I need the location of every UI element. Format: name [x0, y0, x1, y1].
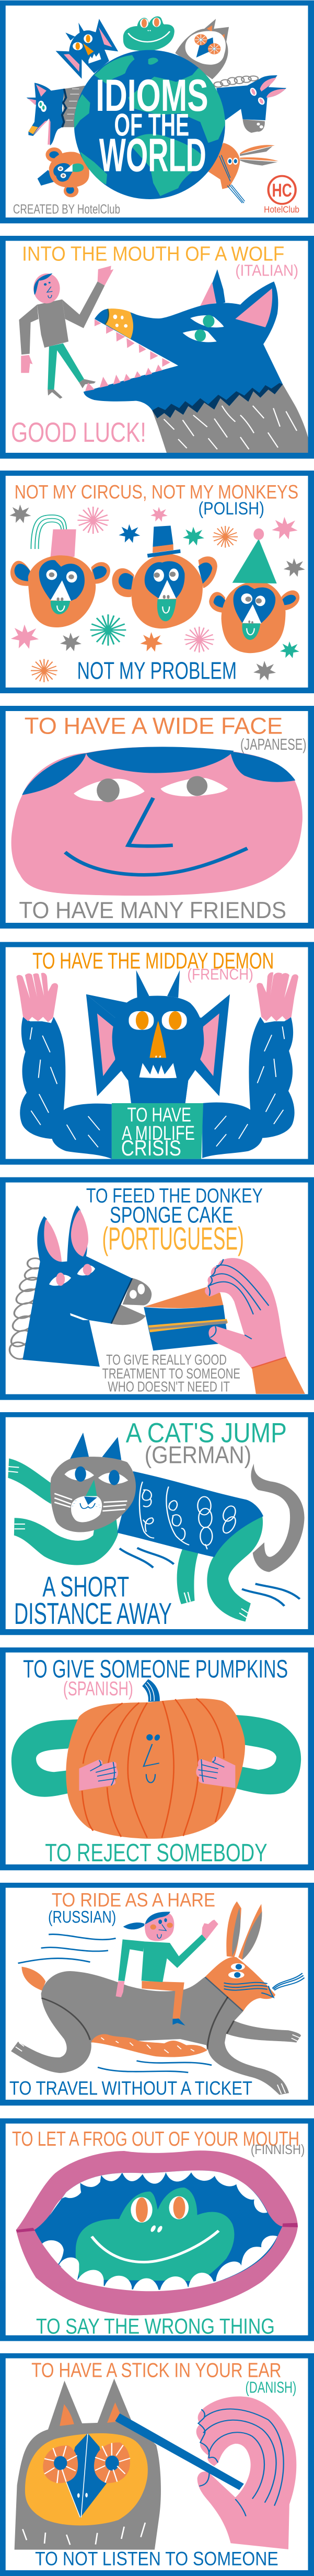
- cat body: [117, 1471, 263, 1557]
- owl: [15, 2378, 161, 2550]
- sign: A MIDLIFE: [122, 1122, 195, 1144]
- sign: TO HAVE: [127, 1104, 191, 1126]
- language label: (RUSSIAN): [48, 1908, 116, 1927]
- frame: [0, 2353, 314, 2576]
- sponge cake: [144, 1286, 228, 1350]
- frame: [0, 1883, 314, 2105]
- demon: [86, 970, 230, 1103]
- wolf teeth: [85, 319, 170, 391]
- big face: [11, 747, 303, 896]
- frame: [0, 236, 314, 459]
- meaning: WHO DOESN'T NEED IT: [108, 1379, 230, 1395]
- panel: frog mouth idiom: [0, 2119, 314, 2341]
- donkey: [6, 1206, 152, 1367]
- panel: midday demon idiom: [0, 942, 314, 1165]
- panel: monkeys idiom: [0, 471, 314, 693]
- frame: [0, 942, 314, 1165]
- cat legs and arms: [8, 1458, 263, 1622]
- logo: HotelClub: HotelClub: [264, 204, 299, 214]
- language label: (ITALIAN): [235, 261, 298, 280]
- rider: [116, 1911, 218, 2025]
- stick: [115, 2413, 244, 2490]
- man: [19, 266, 113, 399]
- logo: HotelClub: HC: [272, 180, 292, 200]
- icon: owl: [175, 19, 229, 79]
- heading: TO HAVE A WIDE FACE: [25, 713, 283, 739]
- panel: stick in ear idiom: [0, 2353, 314, 2576]
- hands: [16, 972, 298, 1022]
- wolf head: [84, 269, 283, 418]
- icon: bear: [38, 147, 89, 197]
- confetti stars: [9, 505, 305, 682]
- speed lines: [18, 1934, 212, 2073]
- language label: (SPANISH): [63, 1677, 133, 1700]
- wolf fur: [152, 384, 308, 453]
- icon: frog: [123, 16, 175, 51]
- title: [96, 70, 208, 181]
- arms: [11, 1715, 301, 1797]
- icon: wolf: [27, 83, 86, 145]
- hand: [205, 1258, 305, 1394]
- meaning: [102, 1352, 240, 1395]
- frame: [0, 471, 314, 693]
- title: WORLD: [99, 129, 206, 181]
- language label: (GERMAN): [145, 1441, 251, 1469]
- panel: wide face idiom: [0, 706, 314, 929]
- logo: HotelClub: [264, 176, 299, 214]
- icon: demon: [56, 19, 118, 79]
- arms: [20, 1017, 295, 1159]
- meaning: TO GIVE REALLY GOOD: [106, 1352, 227, 1368]
- heading: [86, 1184, 263, 1228]
- frame: [0, 1, 314, 223]
- icon: hare: [208, 143, 278, 203]
- panel: hare idiom: [0, 1883, 314, 2105]
- pumpkin: [66, 1679, 245, 1839]
- cat tail: [251, 1463, 305, 1572]
- heading: SPONGE CAKE: [110, 1202, 234, 1228]
- frame: [0, 706, 314, 929]
- meaning: A SHORT: [42, 1570, 129, 1602]
- monkey 3: [209, 529, 299, 653]
- title: OF THE: [114, 107, 189, 142]
- sign: CRISIS: [121, 1136, 181, 1160]
- panel: cat idiom: [0, 1412, 314, 1635]
- frame: [0, 1412, 314, 1635]
- cat paw lines: [8, 1467, 249, 1618]
- frame: [0, 1647, 314, 1870]
- meaning: DISTANCE AWAY: [14, 1597, 172, 1631]
- mouth: [16, 2150, 298, 2315]
- chart: globe: [74, 50, 226, 199]
- monkey 2: [112, 525, 217, 628]
- panel: wolf idiom: [0, 236, 314, 459]
- panel: donkey idiom: [0, 1177, 314, 1400]
- meaning: GOOD LUCK!: [11, 417, 146, 448]
- cat head: [50, 1433, 136, 1532]
- hare: [11, 1902, 305, 2095]
- meaning: [14, 1570, 172, 1631]
- hands: [79, 1757, 235, 1791]
- title: IDIOMS: [96, 70, 208, 121]
- heading: TO RIDE AS A HARE: [52, 1889, 215, 1911]
- language label: (FRENCH): [187, 965, 253, 983]
- frame: [0, 2119, 314, 2341]
- panel: pumpkin idiom: [0, 1647, 314, 1870]
- icon: donkey: [214, 75, 286, 133]
- monkey 1: [10, 515, 110, 627]
- sign: [112, 1103, 203, 1160]
- panel: cover: [0, 1, 314, 223]
- speed lines: [120, 1548, 300, 1606]
- frame: [0, 1177, 314, 1400]
- credit: CREATED BY HotelClub: [13, 201, 120, 216]
- language label: (POLISH): [198, 498, 264, 518]
- hand: [196, 2396, 296, 2549]
